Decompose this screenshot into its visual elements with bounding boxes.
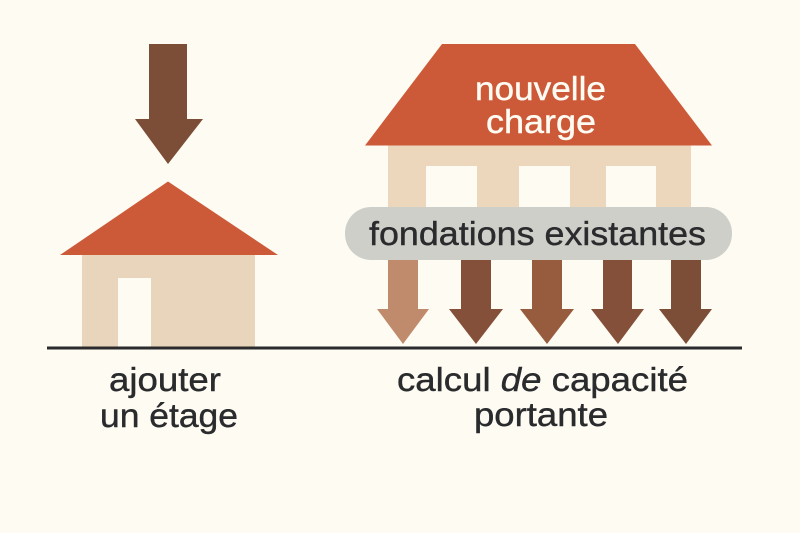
ground line xyxy=(47,346,742,350)
caption: left xyxy=(100,361,238,434)
door xyxy=(118,278,151,347)
caption: right xyxy=(397,361,688,433)
load arrows xyxy=(377,260,712,344)
caption: right: portante xyxy=(474,396,608,433)
foundation label: fondations existantes xyxy=(369,215,706,252)
panel: right house with load xyxy=(345,44,732,344)
roof label: charge xyxy=(486,103,596,140)
foundation pill xyxy=(345,207,732,260)
windows xyxy=(426,166,656,208)
roof label xyxy=(475,70,606,140)
house roof xyxy=(60,182,278,255)
building body xyxy=(388,145,691,208)
icon: downward load arrow xyxy=(135,44,203,164)
panel: left house with arrow xyxy=(60,44,278,347)
caption: right: calcul de capacité xyxy=(397,361,688,398)
house body xyxy=(82,255,255,347)
large roof xyxy=(365,44,712,146)
roof label: nouvelle xyxy=(475,70,606,107)
caption: left: ajouter xyxy=(109,361,221,398)
caption: left: un étage xyxy=(100,397,238,434)
